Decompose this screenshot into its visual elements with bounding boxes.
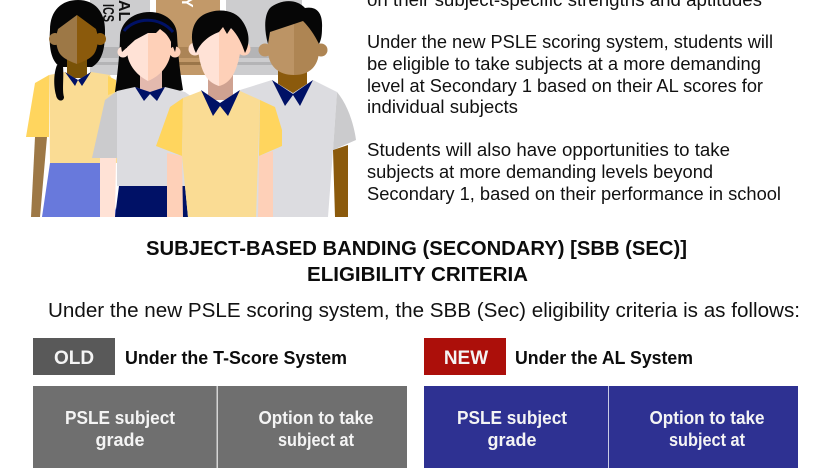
new heading: Under the AL System: [515, 348, 693, 368]
old table header: subject at: [278, 430, 354, 450]
new table header: PSLE subject: [457, 408, 567, 428]
text block: benefits of subject-based banding: level at Secondary 1 based on their AL scores for: [367, 76, 763, 96]
old table header: PSLE subject: [65, 408, 175, 428]
text block: benefits of subject-based banding: individual subjects: [367, 97, 518, 117]
books behind students: ICS: [99, 4, 116, 22]
student: boy with yellow vest: [156, 11, 282, 217]
old table header: Option to take: [258, 408, 374, 428]
text block: benefits of subject-based banding: [367, 0, 781, 204]
books behind students: AL: [115, 0, 132, 22]
title: SUBJECT-BASED BANDING (SECONDARY) [SBB (SEC)]: [146, 238, 687, 260]
old badge: OLD: [54, 348, 94, 369]
subtitle: Under the new PSLE scoring system, the SBB (Sec) eligibility criteria is as follows:: [48, 300, 800, 322]
text block: benefits of subject-based banding: Under the new PSLE scoring system, students will: [367, 32, 773, 52]
illustration: four students in front of books: [26, 0, 356, 217]
old table header: grade: [96, 430, 144, 450]
text block: benefits of subject-based banding: Secondary 1, based on their performance in school: [367, 184, 781, 204]
new badge: NEW: [444, 348, 488, 369]
old heading: Under the T-Score System: [125, 348, 347, 368]
new badge: [424, 338, 506, 375]
new table header: subject at: [669, 430, 745, 450]
student: girl with braid: [26, 0, 118, 217]
student: girl with headband: [92, 12, 195, 217]
title: ELIGIBILITY CRITERIA: [307, 264, 528, 286]
text block: benefits of subject-based banding: Students will also have opportunities to take: [367, 140, 730, 160]
new table header: grade: [488, 430, 536, 450]
new table header: [424, 386, 798, 468]
text block: benefits of subject-based banding: subjects at more demanding levels beyond: [367, 162, 713, 182]
panel: old T-score system: [33, 338, 407, 468]
books behind students: [90, 0, 302, 75]
student: boy with white shirt: [240, 1, 356, 217]
title: [146, 238, 687, 286]
old badge: [33, 338, 115, 375]
panel: new AL system: [424, 338, 798, 468]
old table header: [33, 386, 407, 468]
text block: benefits of subject-based banding: be eligible to take subjects at a more demanding: [367, 54, 761, 74]
new table header: Option to take: [650, 408, 764, 428]
